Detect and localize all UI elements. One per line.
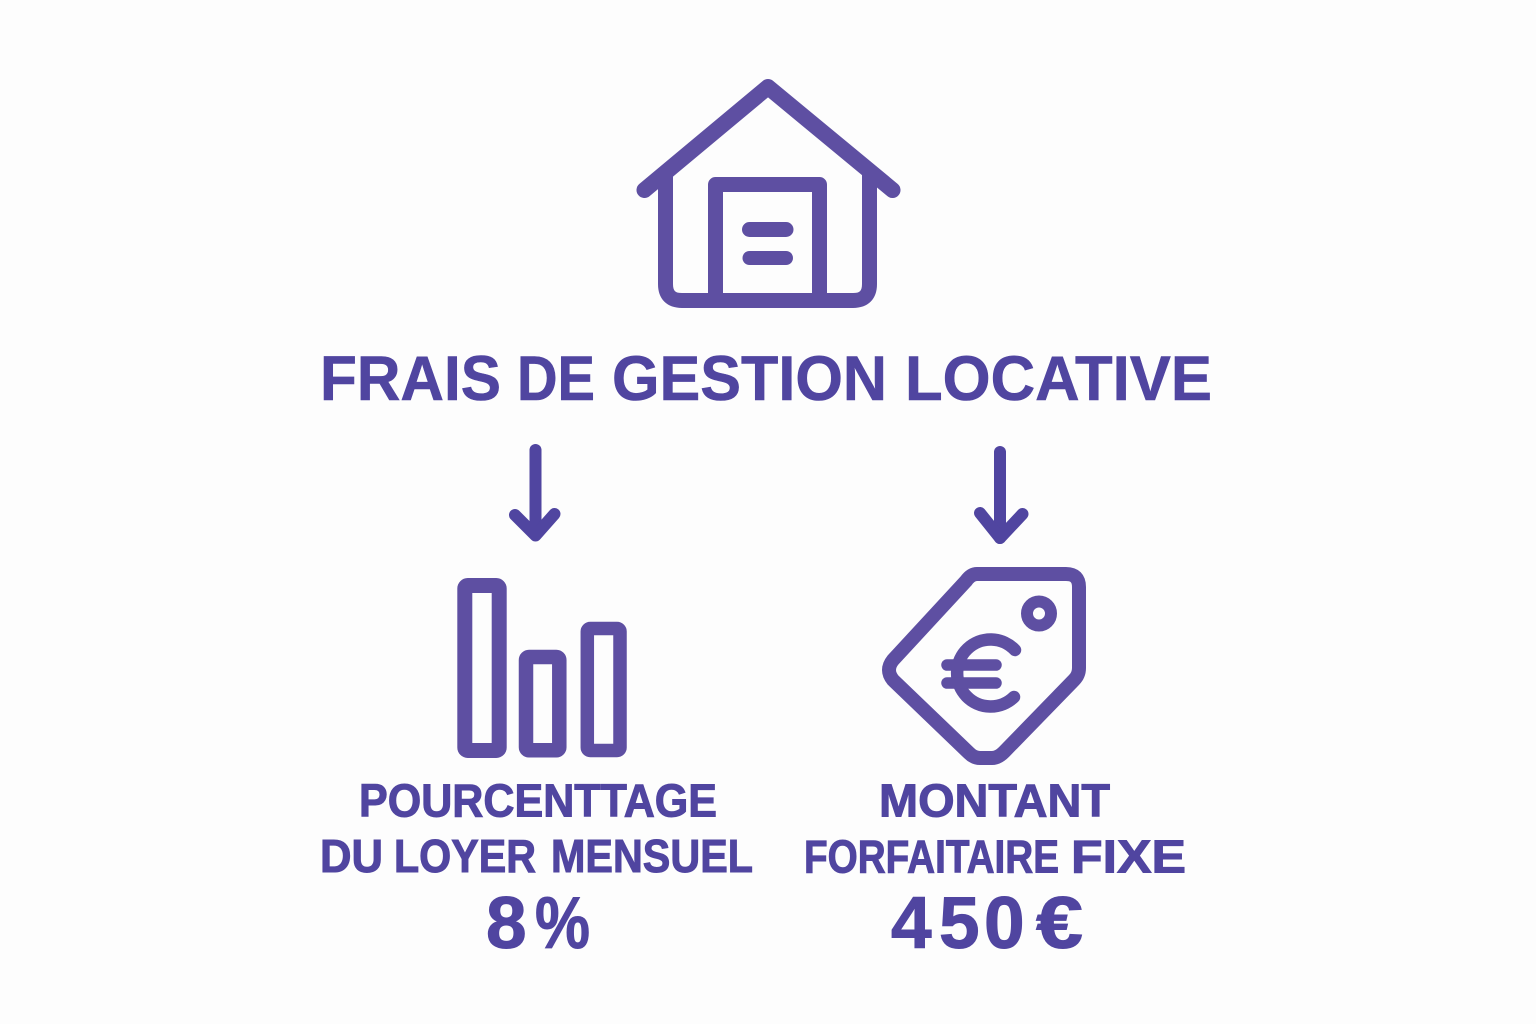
label: percentage: POURCENTTAGE <box>359 774 717 826</box>
arrow: left <box>515 450 554 536</box>
label: fixed amount <box>804 774 1186 882</box>
label: percentage: DU <box>320 830 383 882</box>
icon: euro price tag <box>889 574 1079 758</box>
icon: house with garage door <box>644 87 892 300</box>
title <box>320 344 1212 414</box>
title: LOCATIVE <box>905 344 1212 414</box>
label: fixed amount: FORFAITAIRE <box>804 830 1059 882</box>
label: percentage <box>320 774 753 882</box>
value: 450 €: 450 <box>891 883 1025 964</box>
label: fixed amount: MONTANT <box>879 774 1110 826</box>
value: 8 % <box>486 883 590 964</box>
title: GESTION <box>612 344 887 414</box>
value: 450 €: € <box>1036 883 1083 964</box>
title: FRAIS <box>320 344 501 414</box>
value: 450 € <box>891 883 1083 964</box>
title: DE <box>517 344 595 414</box>
label: percentage: MENSUEL <box>551 830 753 882</box>
value: 8 %: 8 <box>486 883 527 964</box>
arrow: right <box>980 452 1022 538</box>
icon: bar chart <box>465 586 620 750</box>
label: percentage: LOYER <box>394 830 536 882</box>
label: fixed amount: FIXE <box>1071 830 1186 882</box>
value: 8 %: % <box>535 883 590 964</box>
